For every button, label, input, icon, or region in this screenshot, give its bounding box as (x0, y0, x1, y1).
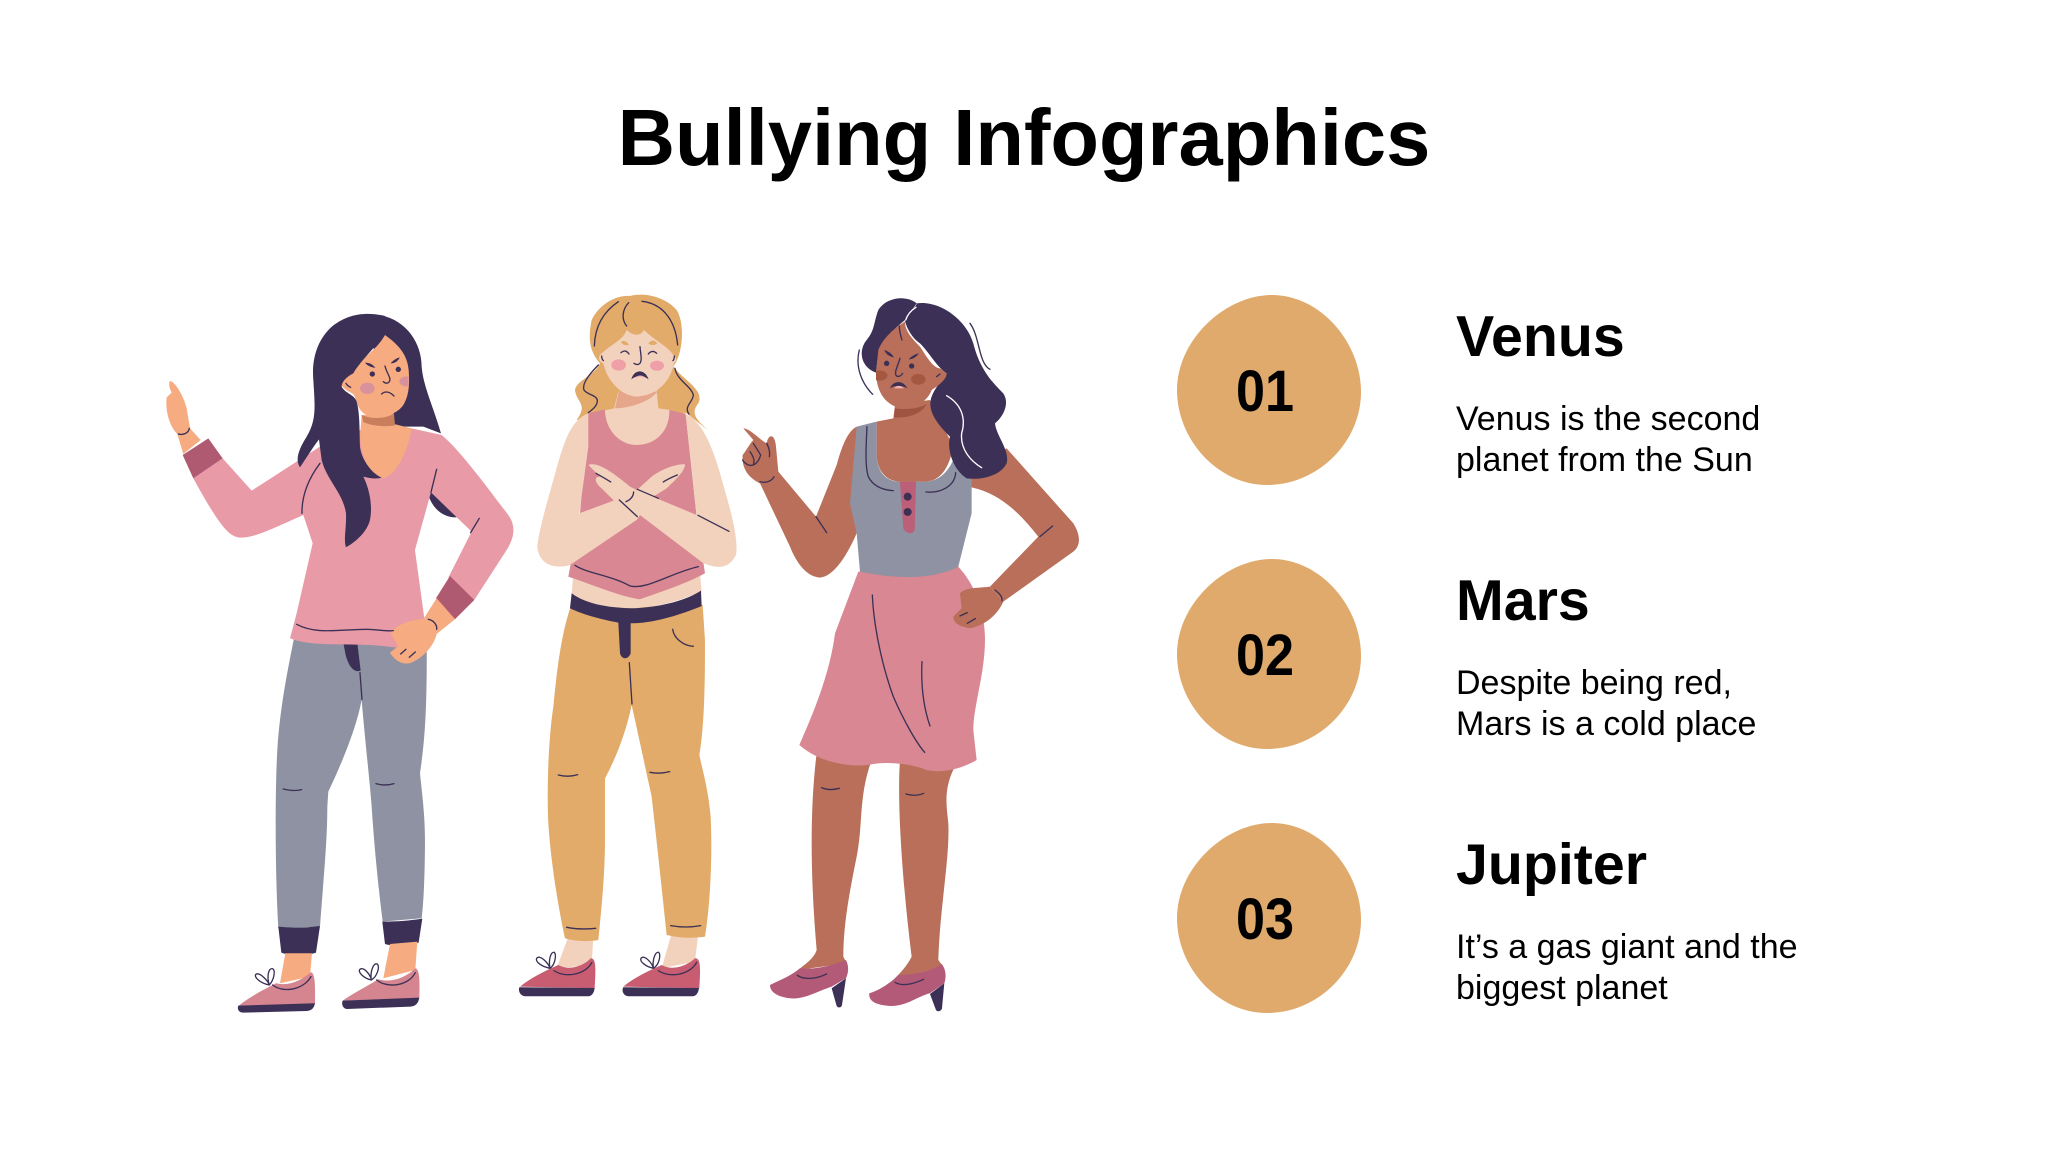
face (876, 322, 947, 408)
item 02: description: Mars is a cold place (1456, 705, 1756, 743)
item 03: heading: Jupiter (1456, 833, 1647, 897)
face (599, 330, 676, 397)
button placket (900, 482, 916, 533)
hand on hip (953, 587, 1003, 628)
item 02: number: 02 (1236, 623, 1294, 688)
chest and neck (360, 413, 412, 478)
item 03: number: 03 (1236, 887, 1294, 952)
figure: woman with dark curly hair in pink skirt (743, 298, 1079, 1011)
belt (570, 591, 702, 658)
figure: blonde woman with crossed arms (519, 295, 737, 996)
tank top (568, 409, 705, 599)
title: Bullying Infographics (618, 93, 1430, 182)
front hair (298, 314, 385, 547)
item 01: heading: Venus (1456, 305, 1625, 369)
right arm behind (967, 448, 1079, 602)
item 01: description: Venus is the second (1456, 400, 1760, 438)
figure: woman with dark hair in pink sweater (166, 314, 513, 1013)
crossed arms (537, 413, 685, 567)
right hand (390, 598, 455, 664)
item 01: description: planet from the Sun (1456, 441, 1753, 479)
left arm and pointing hand (743, 427, 857, 578)
item 01: description (1456, 400, 1760, 479)
raised hand (166, 381, 201, 454)
item 03: description: It’s a gas giant and the (1456, 928, 1798, 966)
chest and neck (877, 400, 953, 482)
item 02: description: Despite being red, (1456, 664, 1732, 702)
midriff (572, 573, 702, 608)
sweater (193, 428, 513, 648)
item 02: description (1456, 664, 1756, 743)
hair (575, 295, 708, 430)
item 01: number: 01 (1236, 359, 1294, 424)
item 02: heading: Mars (1456, 569, 1590, 633)
grey trousers and shoes (238, 633, 427, 1013)
back hair (373, 315, 441, 433)
mustard trousers and shoes (519, 605, 711, 996)
face (341, 335, 409, 417)
grey tank top (850, 422, 972, 577)
hair (905, 303, 1007, 479)
item 03: description: biggest planet (1456, 969, 1668, 1007)
skirt, legs and heels (770, 753, 954, 1011)
item 03: description (1456, 928, 1798, 1007)
neck and upper chest (603, 390, 671, 447)
